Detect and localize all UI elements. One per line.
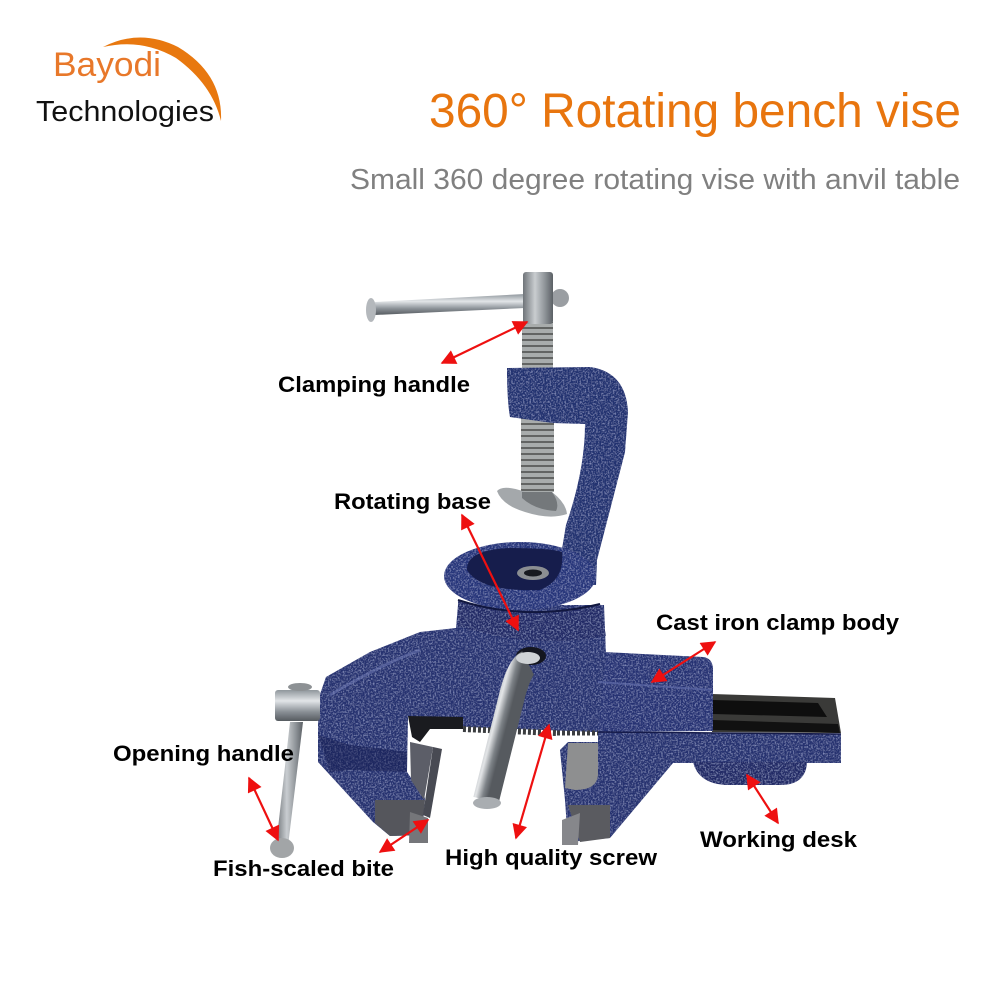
body shading xyxy=(318,600,841,772)
C-frame xyxy=(507,367,628,585)
label: high quality screw: High quality screw xyxy=(445,845,658,870)
ring inner bore xyxy=(467,548,562,590)
arrow: opening handle xyxy=(249,778,278,840)
arrow: clamping handle xyxy=(442,322,527,363)
arrow: cast iron clamp body xyxy=(652,642,715,682)
screw spring and teeth xyxy=(408,716,598,742)
label: cast iron clamp body: Cast iron clamp body xyxy=(656,610,900,635)
working desk black slot xyxy=(712,694,841,733)
label: clamping handle: Clamping handle xyxy=(278,372,470,397)
main body and left jaw xyxy=(318,605,606,836)
moving jaw plate xyxy=(375,742,442,843)
vise illustration xyxy=(270,272,841,858)
subtitle: Small 360 degree rotating vise with anvil table xyxy=(350,164,960,196)
opening handle xyxy=(270,683,320,858)
fixed jaw plate xyxy=(562,743,610,845)
desk foot xyxy=(693,762,807,785)
rotating ring xyxy=(444,542,596,610)
clamping handle bar xyxy=(366,289,569,322)
bearing in bore xyxy=(517,566,549,580)
sliding handle rod xyxy=(473,647,546,809)
clamp foot pad xyxy=(497,488,567,517)
arrow: fish-scaled bite xyxy=(380,820,428,852)
label: working desk: Working desk xyxy=(700,827,858,852)
logo arc xyxy=(103,38,221,121)
arrow: high quality screw xyxy=(516,725,549,838)
logo word: Bayodi: Bayodi xyxy=(53,46,161,84)
arrow: working desk xyxy=(747,775,778,823)
logo word: Technologies: Technologies xyxy=(36,96,214,128)
upper and lower threaded screw xyxy=(521,272,554,492)
label: opening handle: Opening handle xyxy=(113,741,294,766)
blue cast body xyxy=(318,367,841,842)
logo xyxy=(36,38,221,128)
upper arm xyxy=(590,652,713,732)
title: 360° Rotating bench vise xyxy=(429,85,961,138)
lower fixed bar xyxy=(560,732,841,842)
rotating base flange xyxy=(458,600,606,641)
arrow: rotating base xyxy=(462,515,518,630)
label: fish-scaled bite: Fish-scaled bite xyxy=(213,856,394,881)
label: rotating base: Rotating base xyxy=(334,489,491,514)
